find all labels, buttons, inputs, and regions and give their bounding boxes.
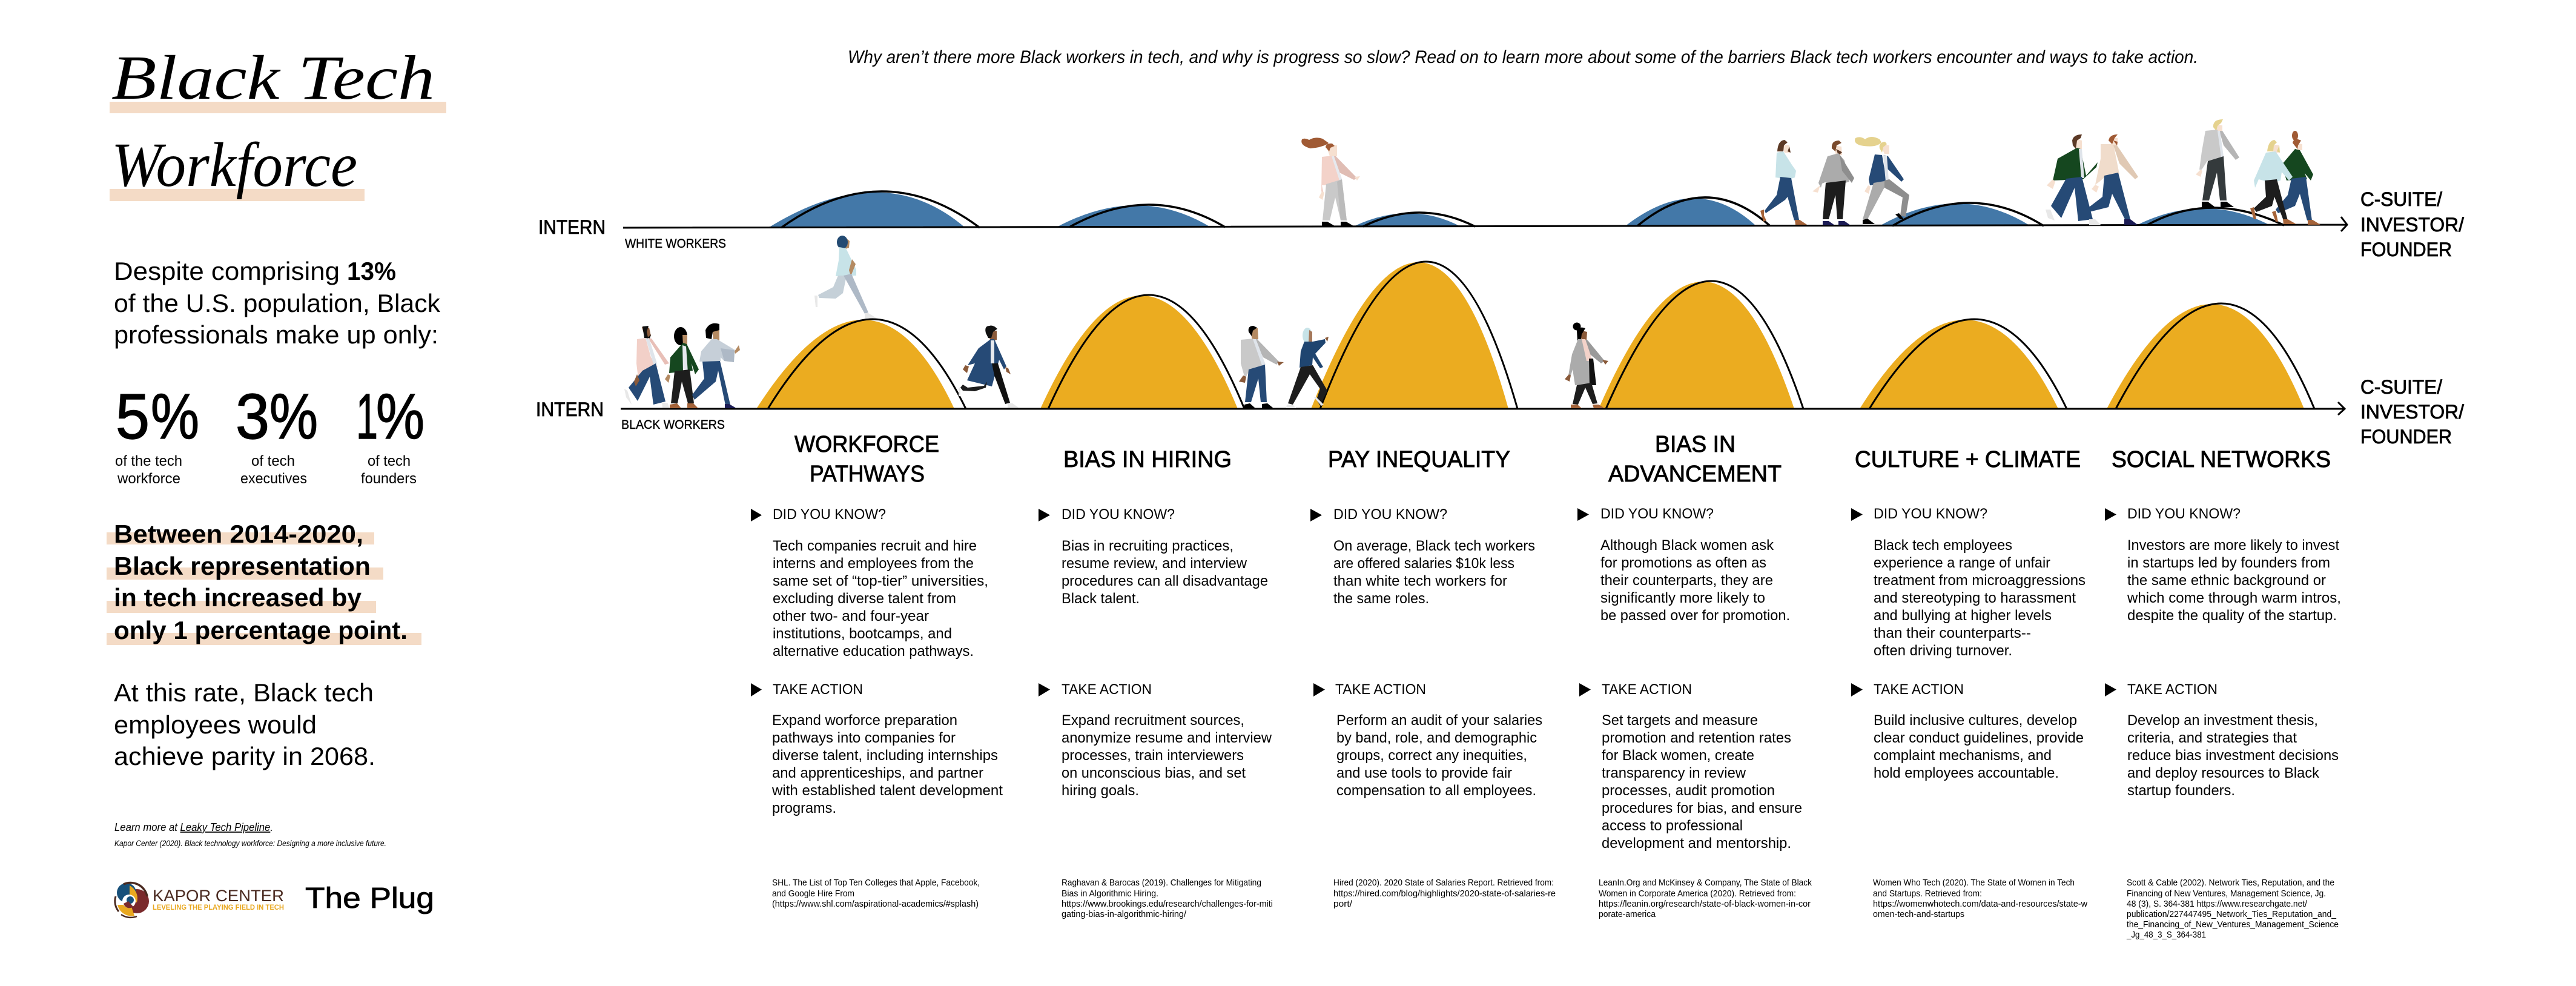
take action: processes, train interviewers [1062, 747, 1244, 764]
take action: diverse talent, including internships [772, 747, 998, 764]
illustration: man in pink hoodie [624, 326, 669, 408]
did you know [1310, 506, 1535, 607]
reference: Raghavan & Barocas (2019). Challenges for Mitigating [1062, 878, 1261, 888]
take action: and deploy resources to Black [2127, 765, 2320, 781]
did you know: resume review, and interview [1062, 555, 1247, 572]
text block: population intro: professionals make up only: [114, 320, 438, 349]
reference: Women Who Tech (2020). The State of Women in Tech [1873, 878, 2075, 888]
take action: programs. [772, 800, 836, 816]
reference: Scott & Cable (2002). Network Ties, Reputation, and the [2127, 878, 2334, 888]
panel: left summary column [107, 43, 446, 918]
reference: LeanIn.Org and McKinsey & Company, The State of Black [1599, 878, 1812, 888]
did you know: which come through warm intros, [2127, 590, 2341, 606]
did you know: the same roles. [1333, 591, 1429, 607]
reference: _Jg_48_3_S_364-381 [2126, 930, 2206, 940]
text block: parity in 2068 [114, 678, 375, 770]
illustration: person in grey kimono sweater [692, 323, 740, 408]
did you know: DID YOU KNOW? [2127, 506, 2241, 522]
reference [2126, 878, 2339, 940]
did you know [2105, 506, 2341, 624]
text block: parity in 2068: achieve parity in 2068. [114, 742, 375, 770]
text block: population intro: Despite comprising [114, 257, 340, 285]
did you know: experience a range of unfair [1874, 555, 2050, 571]
did you know: alternative education pathways. [773, 643, 974, 660]
title: Black Tech Workforce: Black Tech [111, 43, 435, 113]
take action: Expand worforce preparation [772, 712, 957, 729]
did you know: other two- and four-year [773, 608, 929, 624]
illustration: woman with bun in grey coat [1565, 322, 1608, 408]
reference [1873, 878, 2088, 919]
did you know: excluding diverse talent from [773, 591, 956, 607]
illustration: blonde woman in light blue sweater [2250, 140, 2296, 224]
stat: 1% of tech founders: founders [361, 471, 417, 487]
take action [1851, 681, 2084, 781]
reference: and Google Hire From [772, 889, 854, 899]
did you know: Bias in recruiting practices, [1062, 538, 1234, 554]
callout: highlighted representation statement: in tech increased by [114, 583, 362, 612]
reference: gating-bias-in-algorithmic-hiring/ [1062, 910, 1187, 919]
did you know: Although Black women ask [1600, 537, 1774, 554]
reference [1599, 878, 1812, 919]
did you know: DID YOU KNOW? [1874, 506, 1987, 522]
heading: CULTURE + CLIMATE [1855, 447, 2081, 472]
take action: pathways into companies for [772, 730, 956, 746]
did you know: in startups led by founders from [2127, 555, 2330, 571]
logo: Kapor Center: KAPOR CENTER [153, 887, 284, 905]
did you know: and stereotyping to harassment [1874, 590, 2076, 606]
reference: SHL. The List of Top Ten Colleges that Apple, Facebook, [772, 878, 980, 888]
illustration: woman with red bun in green sweater [2272, 131, 2320, 225]
panel: social networks [2105, 447, 2341, 940]
did you know: are offered salaries $10k less [1333, 555, 1514, 572]
did you know: than their counterparts-- [1874, 625, 2031, 641]
did you know: often driving turnover. [1874, 643, 2012, 659]
take action: TAKE ACTION [1602, 681, 1692, 698]
did you know: despite the quality of the startup. [2127, 607, 2337, 624]
yellow hills [756, 262, 2304, 409]
illustration: man in grey hoodie [1239, 326, 1284, 408]
take action: criteria, and strategies that [2127, 730, 2297, 746]
logo: The Plug: The Plug [305, 882, 434, 915]
reference: https://womenwhotech.com/data-and-resources/state-w [1873, 899, 2088, 909]
reference: https://hired.com/blog/highlights/2020-state-of-salaries-re [1333, 889, 1556, 899]
take action: Perform an audit of your salaries [1336, 712, 1542, 729]
label: c-suite, black workers [2360, 376, 2464, 448]
label: c-suite, white workers: C-SUITE/ [2360, 188, 2442, 210]
heading [1608, 432, 1782, 487]
reference: publication/227447495_Network_Ties_Reputation_and_ [2127, 910, 2337, 919]
illustration: blond person in grey hoodie on a hill [2196, 119, 2239, 207]
did you know: treatment from microaggressions [1874, 572, 2086, 589]
take action [751, 681, 1003, 816]
illustration: bearded man in grey sweater [1812, 141, 1854, 225]
reference: porate-america [1599, 910, 1656, 919]
take action: promotion and retention rates [1602, 730, 1791, 746]
title: Black Tech Workforce: Workforce [111, 130, 357, 200]
stat: 3% of tech executives: executives [240, 471, 307, 487]
chart: black workers career path [536, 262, 2464, 448]
label: c-suite, black workers: FOUNDER [2360, 426, 2452, 448]
take action: Set targets and measure [1602, 712, 1758, 729]
did you know: same set of “top-tier” universities, [773, 573, 988, 589]
heading: SOCIAL NETWORKS [2112, 447, 2331, 472]
illustration: blond runner in blue jacket [1855, 137, 1909, 224]
illustration: person in green jacket [665, 327, 699, 408]
did you know: Tech companies recruit and hire [773, 538, 977, 554]
stat: 3% of tech executives [236, 381, 318, 487]
intro sentence: Why aren’t there more Black workers in tech, and why is progress so slow? Read on to learn more about some of the barriers Black tech workers encounter and ways to take action. [848, 47, 2198, 67]
text block: learn more and citation: Kapor Center (2020). Black technology workforce: Designing a more inclusive future. [114, 839, 386, 848]
stat: 1% of tech founders: % [376, 381, 424, 452]
logo: Kapor Center: LEVELING THE PLAYING FIELD IN TECH [153, 904, 284, 912]
heading: ADVANCEMENT [1608, 462, 1782, 487]
take action [1313, 681, 1542, 799]
text block: parity in 2068: At this rate, Black tech [114, 678, 374, 707]
text block: learn more and citation [114, 821, 386, 848]
reference: https://leanin.org/research/state-of-black-women-in-cor [1599, 899, 1811, 909]
label: c-suite, black workers: INVESTOR/ [2360, 401, 2464, 423]
label: intern, black workers [536, 399, 725, 432]
take action: TAKE ACTION [2127, 681, 2218, 698]
take action: hold employees accountable. [1874, 765, 2059, 781]
take action: clear conduct guidelines, provide [1874, 730, 2084, 746]
illustration: woman in hijab climbing [1286, 328, 1329, 408]
did you know: institutions, bootcamps, and [773, 626, 952, 642]
did you know: be passed over for promotion. [1600, 607, 1790, 624]
did you know: Black tech employees [1874, 537, 2012, 554]
chart: white workers career path [538, 188, 2464, 260]
did you know: DID YOU KNOW? [1333, 506, 1447, 523]
heading: WORKFORCE [794, 432, 939, 457]
did you know: the same ethnic background or [2127, 572, 2326, 589]
arrow: white workers timeline [623, 217, 2347, 231]
reference: (https://www.shl.com/aspirational-academics/#splash) [772, 899, 979, 909]
label: c-suite, white workers: INVESTOR/ [2360, 214, 2464, 236]
illustration: woman in light blue sweater [1760, 140, 1807, 225]
icon: Kapor Center mark [115, 883, 149, 918]
did you know: procedures can all disadvantage [1062, 573, 1268, 589]
stat: 1% of tech founders: 1 [356, 381, 378, 452]
did you know: significantly more likely to [1600, 590, 1765, 606]
take action: development and mentorship. [1602, 835, 1791, 852]
take action: Build inclusive cultures, develop [1874, 712, 2077, 729]
stat: 5% of the tech workforce: 5 [116, 381, 150, 452]
callout: highlighted representation statement: only 1 percentage point. [114, 616, 408, 644]
take action: TAKE ACTION [1874, 681, 1964, 698]
did you know: for promotions as often as [1600, 555, 1766, 571]
did you know: Black talent. [1062, 591, 1140, 607]
reference: port/ [1333, 899, 1353, 909]
panel: workforce pathways [751, 432, 1003, 909]
did you know: Investors are more likely to invest [2127, 537, 2339, 554]
take action: processes, audit promotion [1602, 783, 1775, 799]
did you know: DID YOU KNOW? [1062, 506, 1175, 523]
label: c-suite, white workers: FOUNDER [2360, 239, 2452, 260]
heading: BIAS IN [1655, 432, 1735, 457]
label: intern, black workers: INTERN [536, 399, 604, 420]
logo: Kapor Center [115, 883, 284, 918]
reference [1062, 878, 1273, 919]
take action: reduce bias investment decisions [2127, 747, 2339, 764]
take action: hiring goals. [1062, 783, 1139, 799]
take action: and apprenticeships, and partner [772, 765, 983, 781]
take action: anonymize resume and interview [1062, 730, 1272, 746]
reference: Financing of New Ventures, Management Science, Jg. [2127, 889, 2326, 899]
did you know: On average, Black tech workers [1333, 538, 1535, 554]
take action: on unconscious bias, and set [1062, 765, 1246, 781]
take action [2105, 681, 2339, 799]
stat: 3% of tech executives: of tech [251, 453, 295, 469]
stat: 1% of tech founders: of tech [368, 453, 411, 469]
did you know: DID YOU KNOW? [773, 506, 886, 523]
take action: transparency in review [1602, 765, 1746, 781]
reference: omen-tech-and-startups [1873, 910, 1964, 919]
text block: population intro [114, 257, 441, 349]
did you know [1851, 506, 2086, 659]
take action: procedures for bias, and ensure [1602, 800, 1802, 816]
reference: https://www.brookings.edu/research/challenges-for-miti [1062, 899, 1273, 909]
take action: compensation to all employees. [1336, 783, 1536, 799]
panel: pay inequality [1310, 447, 1556, 909]
illustration: man in green jacket [2046, 134, 2101, 225]
label: intern, white workers: INTERN [538, 216, 606, 238]
title: Black Tech Workforce [110, 43, 446, 201]
hill outlines [768, 262, 2314, 409]
illustration: woman with red ponytail [1301, 137, 1360, 226]
stat: 5% of the tech workforce: workforce [117, 471, 180, 487]
label: c-suite, black workers: C-SUITE/ [2360, 376, 2442, 398]
stat: 5% of the tech workforce: % [151, 381, 199, 452]
text block: population intro: 13% [347, 257, 396, 285]
stat: 1% of tech founders [356, 381, 424, 487]
reference: Bias in Algorithmic Hiring. [1062, 889, 1158, 899]
take action: startup founders. [2127, 783, 2235, 799]
illustration: leaping figure in turban [814, 236, 876, 319]
did you know [1039, 506, 1268, 607]
stat: 3% of tech executives: 3 [236, 381, 269, 452]
stat: 3% of tech executives: % [269, 381, 318, 452]
illustration: running person in blue coat [959, 326, 1019, 408]
reference: Women in Corporate America (2020). Retrieved from: [1599, 889, 1796, 899]
take action: for Black women, create [1602, 747, 1754, 764]
take action: groups, correct any inequities, [1336, 747, 1527, 764]
did you know: than white tech workers for [1333, 573, 1507, 589]
did you know: their counterparts, they are [1600, 572, 1773, 589]
text block: population intro: of the U.S. population, Black [114, 289, 441, 317]
did you know: interns and employees from the [773, 555, 974, 572]
heading: BIAS IN HIRING [1063, 447, 1232, 472]
take action: TAKE ACTION [1335, 681, 1426, 698]
take action: and use tools to provide fair [1336, 765, 1512, 781]
take action [1579, 681, 1802, 852]
panel: culture + climate [1851, 447, 2088, 919]
label: c-suite, white workers [2360, 188, 2464, 260]
callout: highlighted representation statement [107, 520, 421, 645]
take action: access to professional [1602, 818, 1743, 834]
heading: PAY INEQUALITY [1328, 447, 1510, 472]
take action: Develop an investment thesis, [2127, 712, 2318, 729]
text block: learn more and citation: Learn more at Leaky Tech Pipeline. [114, 821, 273, 833]
text block: parity in 2068: employees would [114, 710, 317, 739]
take action: with established talent development [771, 783, 1003, 799]
reference: Hired (2020). 2020 State of Salaries Report. Retrieved from: [1333, 878, 1554, 888]
did you know: DID YOU KNOW? [1600, 506, 1714, 522]
take action: by band, role, and demographic [1336, 730, 1537, 746]
stat: 5% of the tech workforce [115, 381, 199, 487]
heading [794, 432, 939, 487]
reference [1333, 878, 1556, 909]
blue hills [768, 193, 2270, 228]
reference: 48 (3), S. 364-381 https://www.researchgate.net/ [2127, 899, 2308, 909]
reference [772, 878, 980, 909]
illustration: bearded man in beige sweater [2087, 134, 2138, 225]
label: intern, white workers [538, 216, 726, 251]
take action: TAKE ACTION [1062, 681, 1152, 698]
stat: 5% of the tech workforce: of the tech [115, 453, 182, 469]
panel: bias in hiring [1039, 447, 1273, 919]
reference: and Startups. Retrieved from: [1873, 889, 1982, 899]
heading: PATHWAYS [810, 462, 925, 487]
panel: bias in advancement [1577, 432, 1812, 919]
label: intern, black workers: BLACK WORKERS [621, 418, 725, 432]
label: intern, white workers: WHITE WORKERS [625, 237, 726, 251]
reference: the_Financing_of_New_Ventures_Management_Science [2127, 920, 2339, 930]
did you know [1577, 506, 1790, 624]
take action: TAKE ACTION [773, 681, 863, 698]
callout: highlighted representation statement: Black representation [114, 552, 371, 580]
take action: complaint mechanisms, and [1874, 747, 2052, 764]
take action: Expand recruitment sources, [1062, 712, 1244, 729]
take action [1039, 681, 1272, 799]
did you know [751, 506, 988, 660]
arrow: black workers timeline [621, 402, 2345, 415]
callout: highlighted representation statement: Between 2014-2020, [114, 520, 363, 548]
did you know: and bullying at higher levels [1874, 607, 2052, 624]
hill outlines [781, 191, 2284, 228]
